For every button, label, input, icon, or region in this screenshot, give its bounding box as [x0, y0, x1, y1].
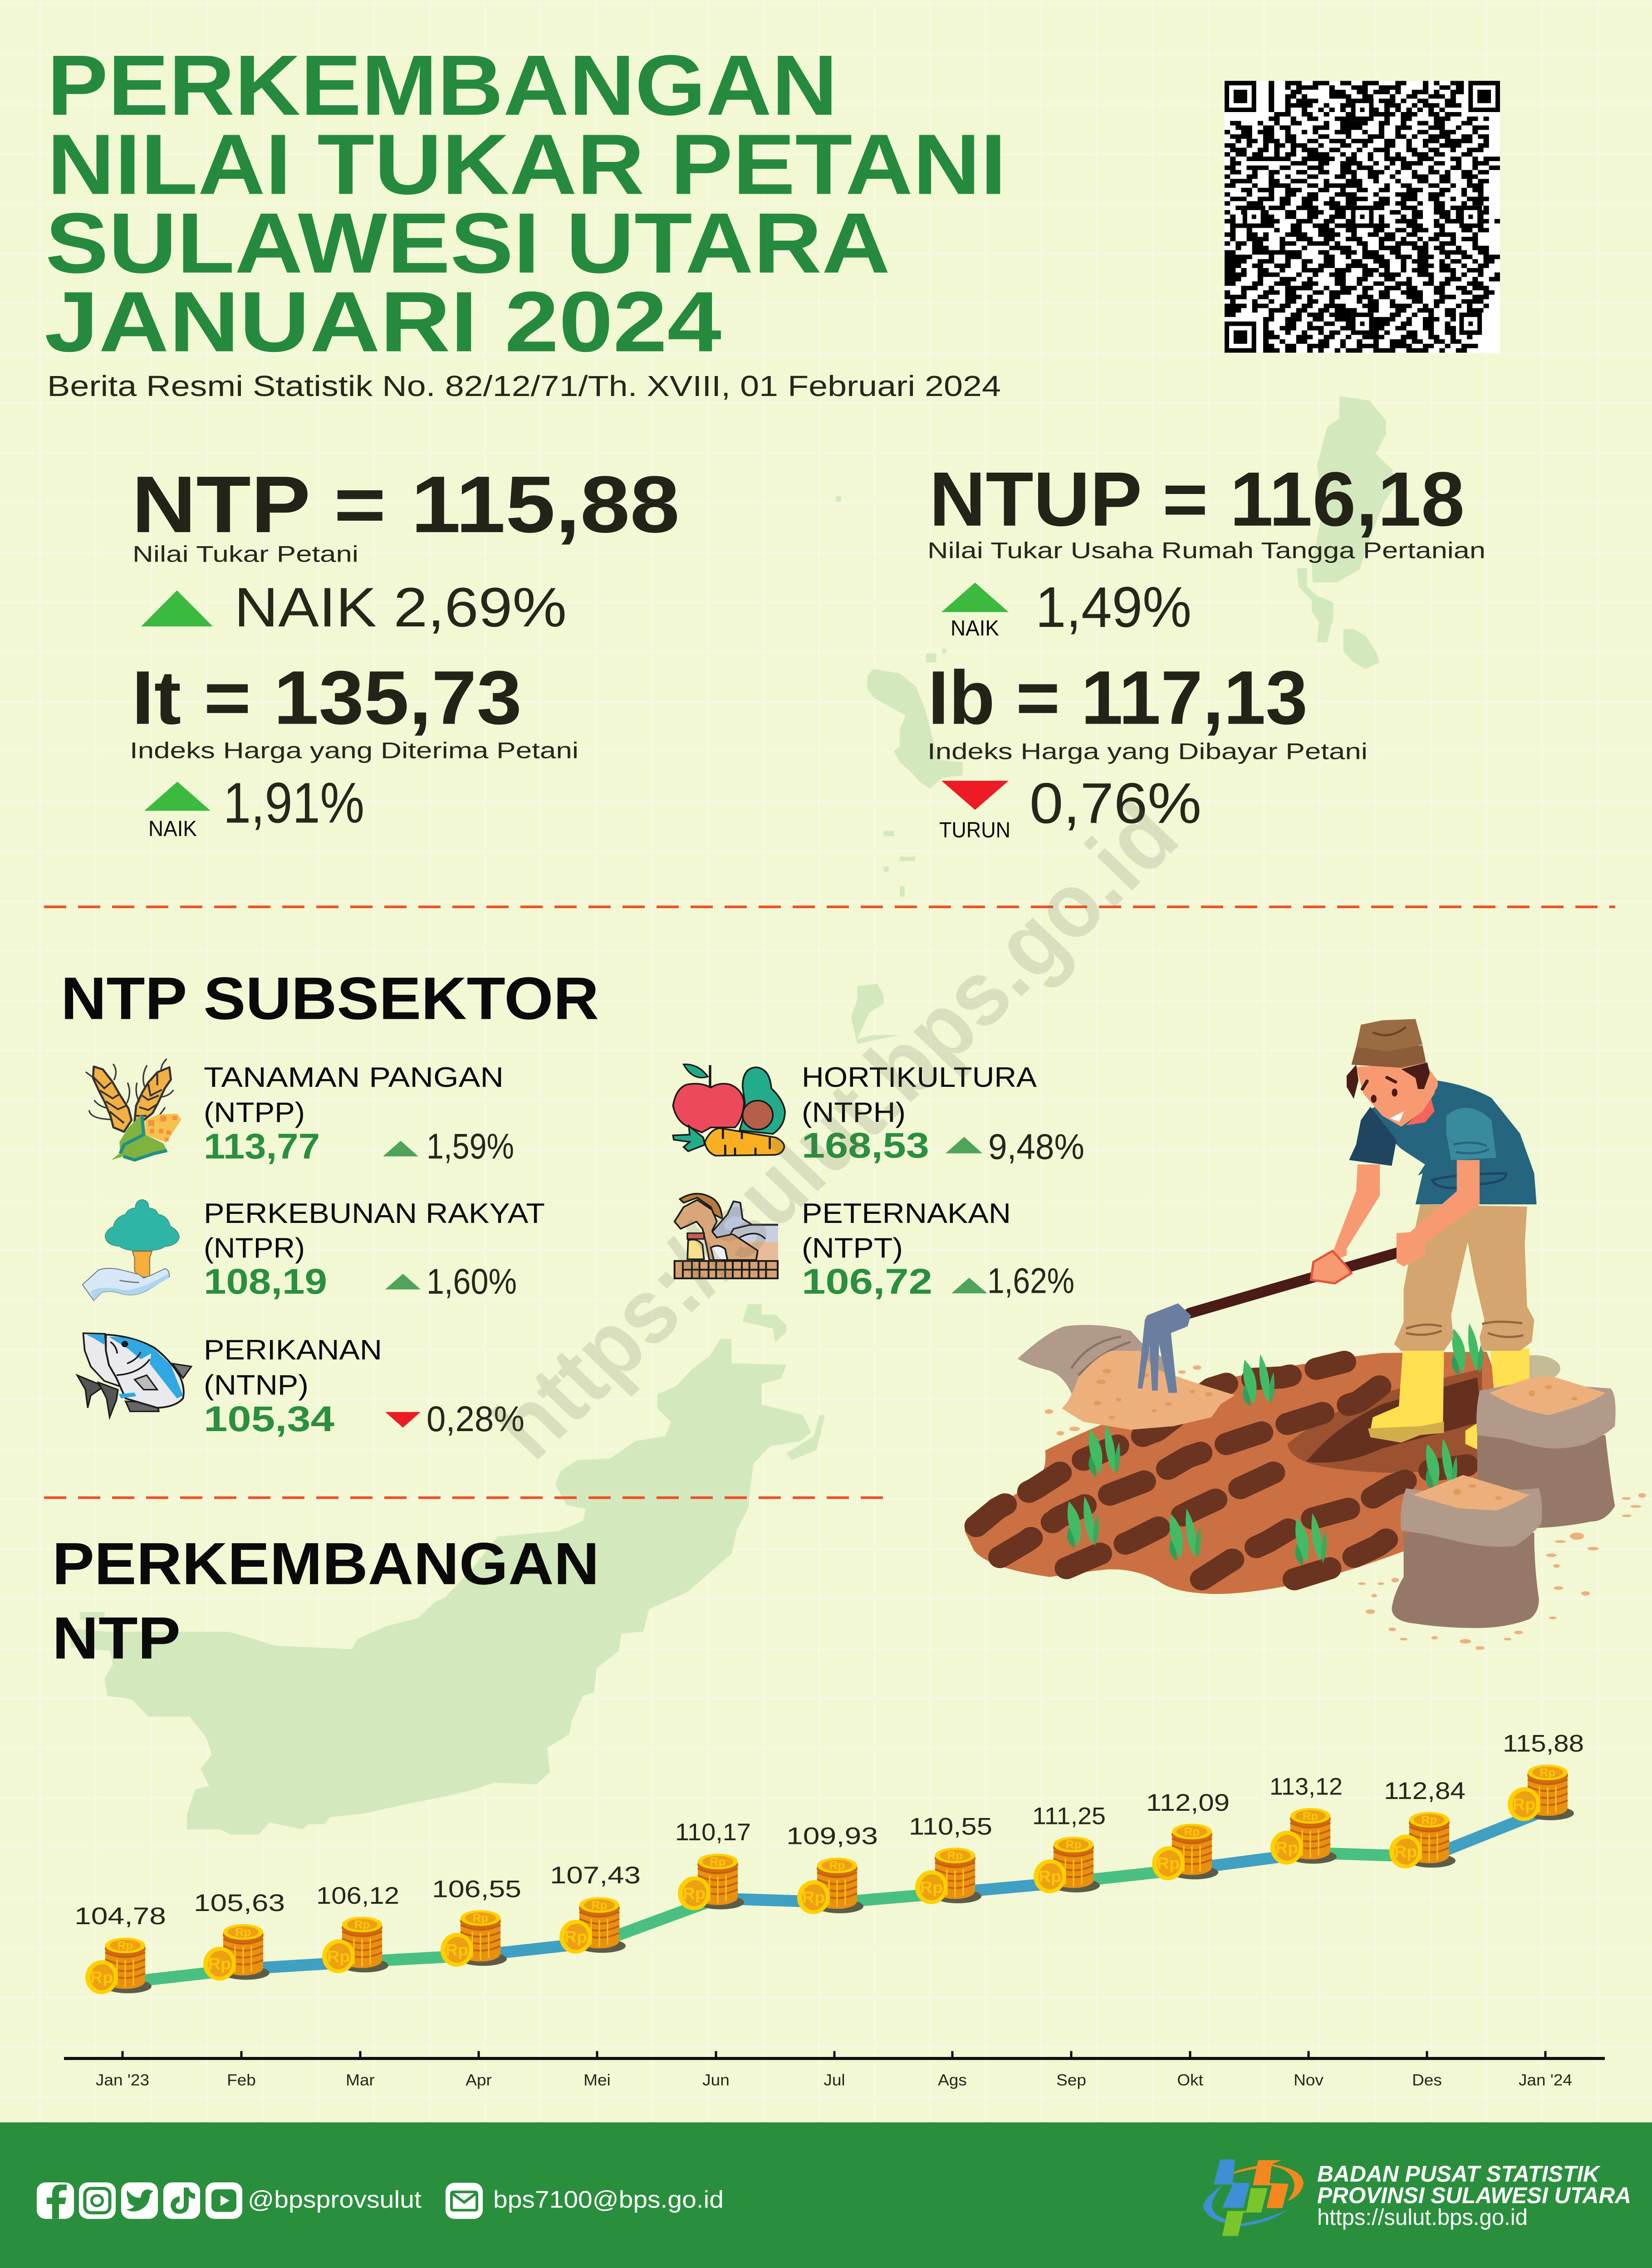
coin stacks: Rp	[1540, 1767, 1555, 1779]
coin stacks: Rp	[592, 1899, 607, 1911]
icon: tree on hand	[83, 1200, 179, 1300]
coin stacks: Rp	[1066, 1839, 1081, 1851]
title	[44, 37, 1006, 370]
coin stacks: Rp	[1513, 1795, 1535, 1813]
coin stacks: Rp	[1039, 1867, 1061, 1886]
heading: Perkembangan NTP: NTP	[52, 1605, 181, 1672]
panel: Peternakan: 106,72	[802, 1262, 932, 1302]
panel: Peternakan: PETERNAKAN	[802, 1198, 1011, 1229]
value labels	[74, 1730, 1584, 1930]
BPS name and URL	[1317, 2161, 1631, 2230]
stat: NTP	[132, 460, 680, 638]
time axis: Jan '23	[96, 2071, 149, 2089]
stat: It: It = 135,73	[132, 655, 522, 740]
BPS name and URL: https://sulut.bps.go.id	[1317, 2204, 1528, 2230]
icon: up triangle	[385, 1274, 421, 1290]
icon: up triangle	[951, 1278, 987, 1293]
icon: down triangle	[385, 1412, 421, 1427]
coin stacks: Rp	[829, 1860, 845, 1872]
value labels: 104,78	[74, 1903, 166, 1930]
panel: Perikanan	[77, 1333, 525, 1439]
icon: up triangle	[946, 1137, 982, 1154]
title: JANUARI 2024	[44, 274, 721, 370]
value labels: 115,88	[1503, 1730, 1584, 1757]
stat: NTUP	[927, 456, 1485, 640]
panel: Hortikultura	[673, 1061, 1084, 1167]
soil field	[965, 1352, 1506, 1594]
stat: It: NAIK	[148, 817, 197, 841]
panel: Tanaman Pangan: 113,77	[204, 1127, 320, 1167]
stat: NTUP: Nilai Tukar Usaha Rumah Tangga Pertanian	[927, 538, 1485, 563]
panel: Perkebunan Rakyat: PERKEBUNAN RAKYAT	[204, 1198, 545, 1229]
map: Sulawesi Utara silhouette	[69, 396, 1396, 1834]
spilled sack and grain pile	[1018, 1325, 1235, 1430]
panel: Perikanan: 0,28%	[426, 1399, 525, 1439]
coin stacks: Rp	[473, 1912, 488, 1925]
panel: Tanaman Pangan: TANAMAN PANGAN	[204, 1061, 504, 1093]
panel: Perkebunan Rakyat: (NTPR)	[204, 1232, 305, 1264]
value labels: 107,43	[550, 1862, 641, 1889]
coin stacks: Rp	[802, 1888, 825, 1906]
grain sacks	[1392, 1375, 1616, 1628]
panel: Hortikultura: (NTPH)	[802, 1097, 906, 1128]
value labels: 105,63	[194, 1890, 285, 1916]
coin stacks: Rp	[90, 1968, 113, 1986]
panel: Tanaman Pangan	[86, 1059, 514, 1167]
coin stacks: Rp	[947, 1850, 963, 1862]
panel: Perikanan: 105,34	[204, 1399, 334, 1439]
time axis: Mar	[346, 2071, 375, 2089]
icon: youtube	[206, 2182, 242, 2219]
icon: fruit and carrot	[673, 1064, 785, 1156]
panel: Perkebunan Rakyat	[83, 1198, 545, 1302]
coin stacks: Rp	[920, 1878, 943, 1897]
coin stacks: Rp	[235, 1926, 251, 1939]
value labels: 106,55	[432, 1876, 521, 1902]
coin stacks: Rp	[1394, 1842, 1417, 1861]
footer	[0, 2122, 1652, 2268]
value labels: 106,12	[316, 1882, 399, 1909]
time axis: Okt	[1177, 2071, 1203, 2089]
icon: twitter	[121, 2182, 158, 2219]
panel: Perikanan: (NTNP)	[204, 1369, 309, 1401]
heading: Perkembangan NTP: PERKEMBANGAN	[52, 1531, 599, 1597]
coin stacks: Rp	[1275, 1838, 1298, 1857]
stat: It: Indeks Harga yang Diterima Petani	[130, 738, 578, 763]
panel: Tanaman Pangan: (NTPP)	[204, 1097, 305, 1128]
stat: Ib: 0,76%	[1029, 772, 1201, 836]
icon: instagram	[79, 2182, 116, 2219]
value labels: 110,17	[675, 1819, 751, 1846]
coin stacks	[83, 1765, 1574, 1996]
panel: Hortikultura: 168,53	[802, 1126, 929, 1166]
coin stacks: Rp	[118, 1940, 133, 1952]
stat: Ib: Ib = 117,13	[928, 655, 1308, 740]
time axis: Nov	[1294, 2071, 1324, 2089]
stat: NTUP: NAIK	[951, 616, 999, 640]
stat: NTP: NTP = 115,88	[132, 460, 680, 549]
watermark: https://sulut.bps.go.id	[473, 783, 1197, 1477]
panel: Peternakan: 1,62%	[987, 1261, 1074, 1301]
value labels: 113,12	[1270, 1773, 1343, 1800]
value labels: 111,25	[1032, 1803, 1106, 1829]
coin stacks: Rp	[1184, 1826, 1200, 1838]
plants	[1067, 1323, 1483, 1565]
stat: Ib	[927, 655, 1368, 842]
subtitle: Berita Resmi Statistik No. 82/12/71/Th. XVIII, 01 Februari 2024	[47, 370, 1001, 402]
heading: Perkembangan NTP	[52, 1531, 599, 1672]
panel: Hortikultura: HORTIKULTURA	[802, 1061, 1037, 1093]
icon: facebook	[37, 2182, 74, 2219]
icon: fish	[77, 1333, 191, 1417]
stat: It: 1,91%	[223, 771, 364, 835]
chart line segments	[125, 1809, 1548, 1982]
coin stacks: Rp	[683, 1884, 706, 1902]
panel: Peternakan	[675, 1194, 1074, 1302]
title: NILAI TUKAR PETANI	[47, 116, 1006, 212]
icon: up triangle	[383, 1141, 418, 1156]
time axis: Sep	[1056, 2071, 1086, 2089]
farmer	[1311, 1019, 1560, 1451]
icon: down triangle	[941, 781, 1009, 810]
social handle: @bpsprovsulut	[248, 2186, 422, 2213]
coin stacks: Rp	[1303, 1810, 1318, 1823]
coin stacks: Rp	[710, 1856, 726, 1868]
icon: up triangle	[141, 591, 213, 626]
value labels: 112,84	[1384, 1778, 1466, 1804]
BPS logo	[1203, 2160, 1304, 2236]
coin stacks: Rp	[446, 1941, 468, 1959]
scattered grains	[1044, 1365, 1646, 1650]
icon: up triangle	[144, 782, 211, 811]
icon: farm animals	[675, 1194, 778, 1278]
BPS name and URL: BADAN PUSAT STATISTIK	[1317, 2161, 1601, 2186]
coin stacks: Rp	[1157, 1854, 1180, 1872]
time axis: Jan '24	[1519, 2071, 1572, 2089]
stat: NTUP: NTUP = 116,18	[929, 456, 1465, 542]
icon: wheat and corn	[86, 1059, 181, 1160]
stat: Ib: Indeks Harga yang Dibayar Petani	[927, 738, 1368, 764]
panel: Peternakan: (NTPT)	[802, 1232, 903, 1264]
illustration: farmer hoeing soil with grain sacks	[965, 1019, 1646, 1650]
stat: NTP: Nilai Tukar Petani	[132, 541, 358, 567]
coin stacks: Rp	[208, 1954, 231, 1973]
heading: NTP Subsektor: NTP SUBSEKTOR	[61, 965, 599, 1032]
time axis: Des	[1412, 2071, 1442, 2089]
coin stacks: Rp	[1422, 1814, 1437, 1826]
icon: mail	[446, 2183, 483, 2219]
time axis: Feb	[227, 2071, 256, 2089]
coin stacks: Rp	[564, 1927, 587, 1946]
time axis	[64, 2051, 1605, 2089]
email: bps7100@bps.go.id	[493, 2186, 724, 2213]
title: PERKEMBANGAN	[47, 37, 838, 133]
panel: Perkebunan Rakyat: 1,60%	[426, 1262, 517, 1302]
value labels: 109,93	[786, 1823, 878, 1849]
panel: Hortikultura: 9,48%	[988, 1127, 1084, 1167]
time axis: Mei	[583, 2071, 611, 2089]
icon: up triangle	[941, 582, 1009, 612]
QR code	[1225, 81, 1511, 353]
stat: NTP: NAIK 2,69%	[234, 576, 567, 638]
time axis: Jul	[824, 2071, 845, 2089]
panel: Perkebunan Rakyat: 108,19	[204, 1262, 327, 1302]
hoe	[1138, 1232, 1468, 1393]
panel: Perikanan: PERIKANAN	[204, 1334, 382, 1366]
value labels: 110,55	[909, 1813, 992, 1840]
title: SULAWESI UTARA	[45, 195, 890, 291]
coin stacks: Rp	[327, 1947, 350, 1965]
stat: Ib: TURUN	[939, 818, 1010, 842]
stat: NTUP: 1,49%	[1035, 576, 1191, 639]
coin stacks: Rp	[354, 1919, 370, 1931]
icon: tiktok	[163, 2182, 200, 2219]
line chart: perkembangan NTP	[64, 1730, 1605, 2089]
value labels: 112,09	[1146, 1789, 1230, 1816]
time axis: Apr	[466, 2071, 492, 2089]
BPS name and URL: PROVINSI SULAWESI UTARA	[1317, 2183, 1631, 2208]
time axis: Ags	[938, 2071, 967, 2089]
panel: Tanaman Pangan: 1,59%	[426, 1127, 514, 1167]
stat: It	[130, 655, 578, 841]
time axis: Jun	[702, 2071, 730, 2089]
